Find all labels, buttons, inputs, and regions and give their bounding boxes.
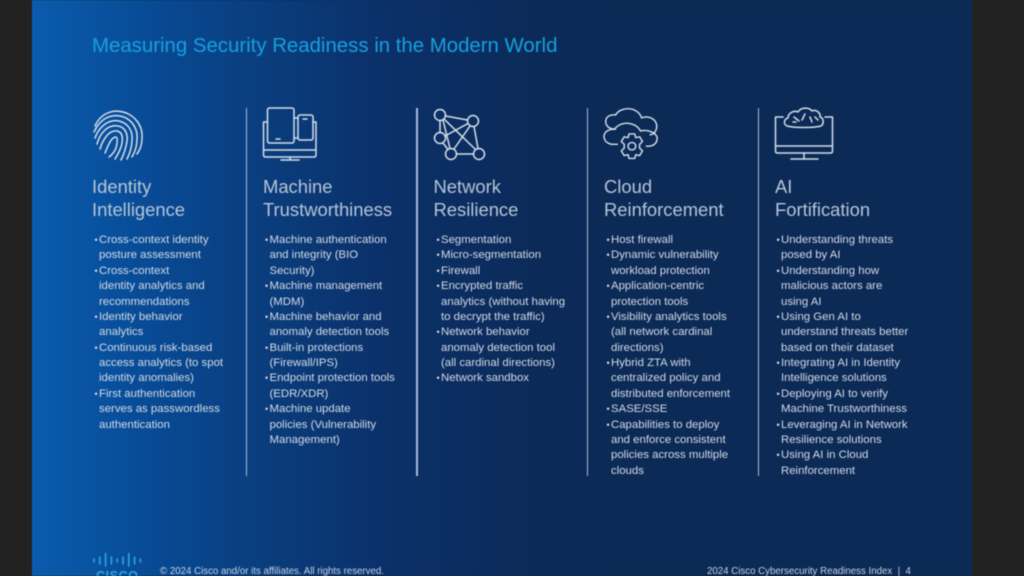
list: AI Fortification: Leveraging AI in Network [781,418,908,430]
list: Network Resilience: (all cardinal directions) [441,357,555,369]
list: Machine Trustworthiness: Machine behavior and [270,311,382,323]
list: Cloud Reinforcement: centralized policy and [611,372,721,384]
list: AI Fortification: based on their dataset [781,342,894,354]
list: Identity Intelligence: recommendations [99,296,190,308]
icon: cloud with gear [602,107,659,160]
heading: Cloud Reinforcement: Reinforcement [604,199,724,220]
list: Network Resilience: to decrypt the traffic) [441,311,545,323]
list: Machine Trustworthiness: (EDR/XDR) [270,388,328,400]
list: Cloud Reinforcement: policies across multiple [611,449,728,461]
list: Cloud Reinforcement: protection tools [611,296,688,308]
list: Machine Trustworthiness: Machine management [270,280,382,292]
list: Cloud Reinforcement: Capabilities to deploy [611,418,719,430]
heading: AI Fortification: AI [775,176,792,197]
list: AI Fortification: Reinforcement [781,465,855,477]
heading: Machine Trustworthiness [262,176,392,220]
list: AI Fortification: Machine Trustworthiness [781,403,907,415]
list: Machine Trustworthiness: and integrity (BIO [270,249,358,261]
list: Cloud Reinforcement [606,234,730,477]
list: Identity Intelligence [94,234,224,430]
list: Machine Trustworthiness: (Firewall/IPS) [270,357,338,369]
heading: Network Resilience: Resilience [434,199,518,220]
list: AI Fortification [776,234,909,477]
heading: AI Fortification: Fortification [775,199,870,220]
list: Machine Trustworthiness [264,234,396,446]
list: Cloud Reinforcement: Application-centric [611,280,704,292]
list: Network Resilience: Network sandbox [441,372,529,384]
list: Identity Intelligence: Cross-context [99,265,169,277]
footer logo: Cisco [92,552,142,576]
icon: fingerprint [92,110,144,162]
list: Machine Trustworthiness: Endpoint protection tools [270,372,395,384]
list: Cloud Reinforcement: Dynamic vulnerability [611,249,719,261]
heading: Identity Intelligence: Identity [92,176,151,197]
list: Network Resilience: Micro-segmentation [441,249,541,261]
title: Measuring Security Readiness in the Modern World [92,35,557,57]
list: Cloud Reinforcement: Host firewall [611,234,673,246]
list: AI Fortification: using AI [781,296,822,308]
list: Identity Intelligence: access analytics (to spot [99,357,223,369]
heading: Cloud Reinforcement [604,176,724,220]
list: Machine Trustworthiness: (MDM) [270,296,304,308]
list: Cloud Reinforcement: directions) [611,342,664,354]
list: Identity Intelligence: Continuous risk-based [99,342,212,354]
icon: devices [262,106,318,162]
heading: Identity Intelligence: Intelligence [92,199,185,220]
list: AI Fortification: Understanding threats [781,234,893,246]
list: AI Fortification: posed by AI [781,249,841,261]
list: AI Fortification: malicious actors are [781,280,882,292]
heading: Machine Trustworthiness: Machine [263,176,333,197]
list: AI Fortification: understand threats better [781,326,908,338]
list: Identity Intelligence: posture assessment [99,249,201,261]
icon: monitor with brain [774,106,834,160]
list: Machine Trustworthiness: anomaly detection tools [270,326,389,338]
list: Cloud Reinforcement: clouds [611,465,644,477]
list: Cloud Reinforcement: distributed enforcement [611,388,730,400]
list: Network Resilience: analytics (without having [441,296,565,308]
list: Cloud Reinforcement: Hybrid ZTA with [611,357,691,369]
list: Identity Intelligence: authentication [99,418,170,430]
list: Identity Intelligence: First authentication [99,388,195,400]
list: Cloud Reinforcement: workload protection [611,265,710,277]
heading: Machine Trustworthiness: Trustworthiness [263,199,392,220]
list: Network Resilience: Segmentation [441,234,511,246]
list: Identity Intelligence: Identity behavior [99,311,183,323]
list: Identity Intelligence: serves as passwordless [99,403,220,415]
list: Cloud Reinforcement: (all network cardinal [611,326,712,338]
list: Network Resilience: Network behavior [441,326,530,338]
list: AI Fortification: Understanding how [781,265,879,277]
heading: Identity Intelligence [92,176,185,221]
list: AI Fortification: Using AI in Cloud [781,449,868,461]
list: AI Fortification: Intelligence solutions [781,372,887,384]
list: Identity Intelligence: Cross-context identity [99,234,209,246]
list: Cloud Reinforcement: SASE/SSE [611,403,667,415]
list: AI Fortification: Integrating AI in Identity [781,357,900,369]
heading: AI Fortification [774,176,870,220]
list: Identity Intelligence: identity analytics and [99,280,205,292]
list: Machine Trustworthiness: Machine authentication [270,234,387,246]
heading: Network Resilience: Network [434,176,501,197]
list: Network Resilience: Encrypted traffic [441,280,523,292]
list: Identity Intelligence: analytics [99,326,143,338]
list: AI Fortification: Using Gen AI to [781,311,861,323]
list: Machine Trustworthiness: policies (Vulnerability [270,418,376,430]
list: Cloud Reinforcement: and enforce consistent [611,434,726,446]
list: Machine Trustworthiness: Management) [270,434,340,446]
list: Cloud Reinforcement: Visibility analytics tools [611,311,727,323]
list: AI Fortification: Deploying AI to verify [781,388,888,400]
icon: network [433,108,486,161]
heading: Cloud Reinforcement: Cloud [604,176,652,197]
list: Network Resilience: Firewall [441,265,480,277]
list: Network Resilience: anomaly detection tool [441,342,555,354]
heading: Network Resilience [434,176,518,220]
list: Machine Trustworthiness: Built-in protections [270,342,363,354]
list: Machine Trustworthiness: Machine update [270,403,351,415]
list: Identity Intelligence: identity anomalies) [99,372,194,384]
list: Machine Trustworthiness: Security) [270,265,314,277]
list: Network Resilience [436,234,566,384]
list: AI Fortification: Resilience solutions [781,434,882,446]
